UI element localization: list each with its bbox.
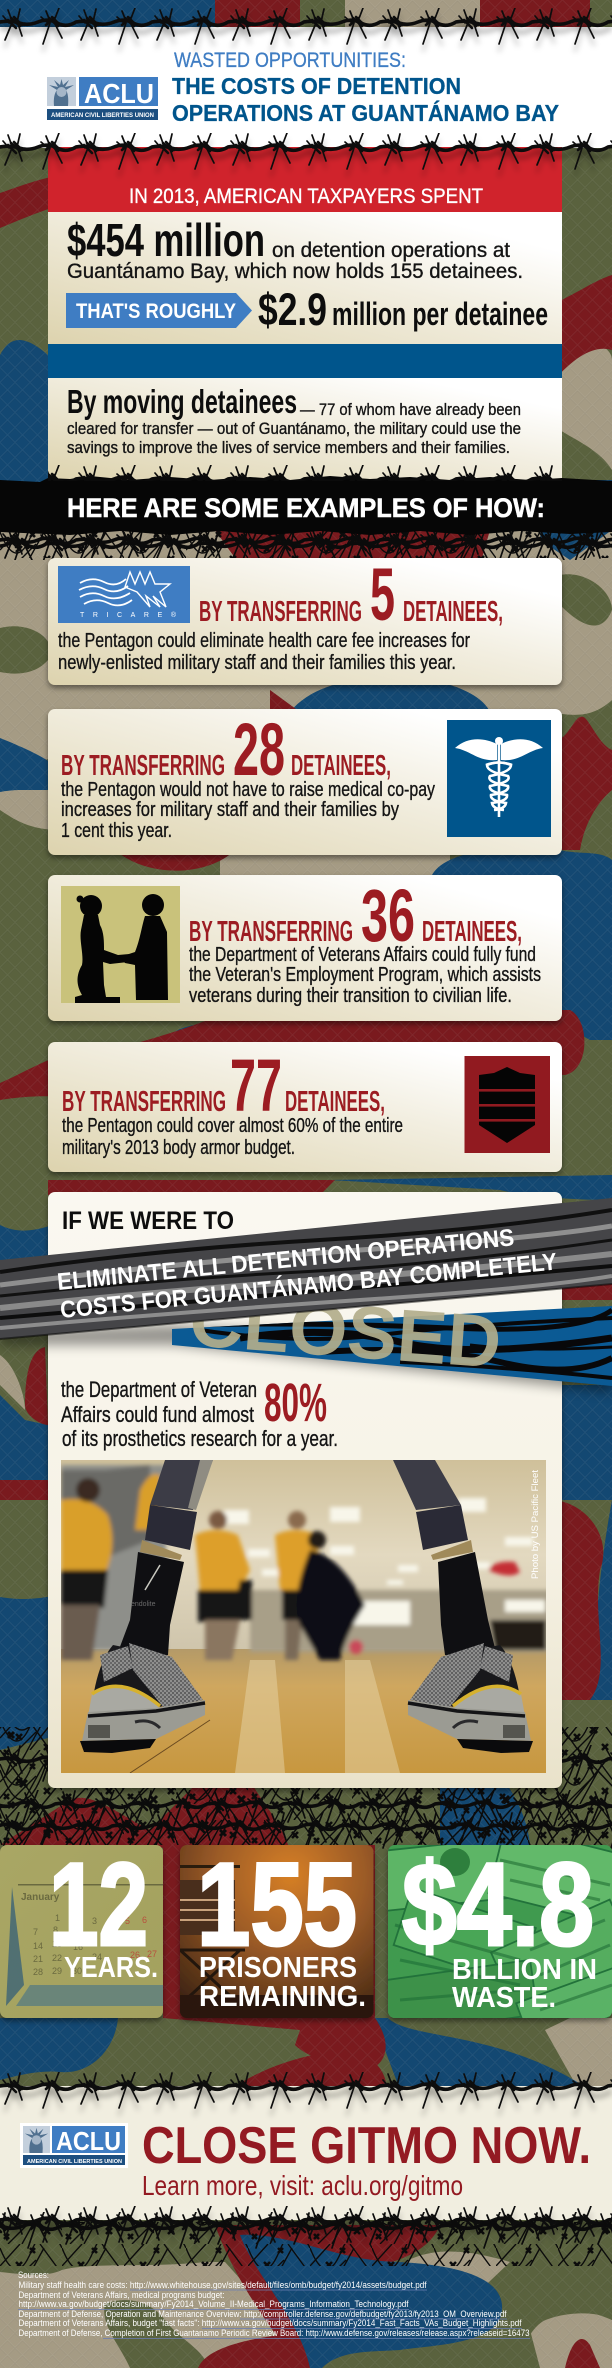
label billion in waste [452,1954,597,2014]
calendar image: 24 [92,1952,102,1962]
calendar image: 14 [33,1941,43,1951]
barbed wire strand above footer [0,2072,612,2114]
sources: Military staff health care costs: http://www.whitehouse.gov/sites/default/files/omb/budget/fy2014/assets/budget.pdf [18,2280,427,2290]
ACLU logo top: AMERICAN CIVIL LIBERTIES UNION [51,113,154,119]
description [58,630,470,674]
description: 1 cent this year. [61,820,172,842]
money image [388,1845,612,2018]
red heading strip: IN 2013, AMERICAN TAXPAYERS SPENT [129,185,483,208]
description [61,779,435,842]
wire tangle under black band [0,526,612,560]
description [62,1115,403,1159]
heading: BY TRANSFERRING [189,916,353,948]
description with 80 percent [61,1373,338,1451]
photo credit: Photo by US Pacific Fleet [530,1469,540,1579]
calendar image: 7 [33,1927,38,1937]
ACLU logo top: ACLU [84,78,154,109]
calendar image: 27 [147,1949,157,1959]
heading: BY TRANSFERRING [199,596,362,628]
tape text: COSTS FOR GUANTÁNAMO BAY COMPLETELY [59,1247,558,1324]
label prisoners remaining: PRISONERS [199,1952,357,1984]
closed stamp: CLOSED [187,1278,504,1384]
calendar image: 26 [130,1950,140,1960]
description: increases for military staff and their families by [61,799,399,821]
heading: DETAINEES, [285,1086,385,1118]
title: the costs of detention operations: THE COSTS OF DETENTION [172,73,461,99]
calendar image: 16 [73,1942,83,1952]
tile: 155 prisoners remaining [180,1839,374,2018]
icon: caduceus [447,720,551,837]
right prosthetic [393,1460,533,1753]
2.9 million per detainee: $2.9 [258,284,327,335]
icon: body armor shield [464,1056,550,1153]
label prisoners remaining: REMAINING. [199,1981,366,2013]
description: the Pentagon could cover almost 60% of the entire [62,1115,403,1137]
by moving detainees text [67,383,521,457]
guard tower image [180,1865,374,2018]
calendar image: 15 [52,1939,62,1949]
footer ACLU logo: ACLU [56,2126,121,2156]
454 million text: Guantánamo Bay, which now holds 155 detainees. [67,260,523,283]
title: the costs of detention operations [172,73,559,126]
description [189,944,541,1007]
label billion in waste: WASTE. [452,1982,556,2014]
by moving detainees text: — 77 of whom have already been [300,401,521,419]
2.9 million per detainee [258,284,548,335]
sources: Department of Veterans Affairs, medical programs budget: [18,2290,224,2300]
heading [189,874,522,957]
454 million text [67,214,523,283]
number 12: 12 [49,1839,148,1971]
sources [18,2270,530,2338]
calendar image: 29 [52,1966,62,1976]
title: the costs of detention operations: OPERATIONS AT GUANTÁNAMO BAY [172,99,559,126]
calendar image [6,1884,163,2006]
calendar image: 6 [142,1915,147,1925]
heading [61,708,391,791]
454 million text: on detention operations at [272,239,510,262]
description: newly-enlisted military staff and their families this year. [58,652,456,674]
by moving detainees text: cleared for transfer — out of Guantánamo, the military could use the [67,420,521,438]
ACLU logo top [47,77,158,120]
photo: prosthetic legs in gym [61,1460,550,1773]
heading [199,553,503,636]
barbed wire strand under header [0,133,612,175]
calendar image: 5 [125,1916,130,1926]
sources: Department of Defense, Operation and Maintenance Overview: http://comptroller.defense.gov/defbudget/fy2013/fy2013_OM_Overview.pdf [18,2309,507,2319]
label years: YEARS. [64,1952,158,1984]
label prisoners remaining [199,1952,366,2013]
sources: Department of Veterans Affairs, budget "fast facts": http://www.va.gov/budget/docs/summary/Fy2014_Fast_Facts_VAs_Budget_Highlights.pdf [18,2318,522,2328]
calendar image: 3 [92,1916,97,1926]
card: transferring 77 detainees [48,1042,562,1172]
sources: Department of Defense, Completion of First Guantanamo Periodic Review Board: http://www.defense.gov/releases/release.aspx?releaseid=16473 [18,2328,530,2338]
heading [62,1044,385,1127]
call to action: Learn more, visit: aclu.org/gitmo [142,2170,463,2201]
heading: BY TRANSFERRING [61,750,225,782]
call to action [142,2117,591,2201]
footer band [0,2086,612,2220]
tape text: ELIMINATE ALL DETENTION OPERATIONS [56,1224,515,1296]
white header band [0,27,612,148]
blue tape [172,1306,612,1386]
dense barbed wire behind the prosthetics panel [0,1727,612,1854]
heading: if we were to: IF WE WERE TO [62,1207,234,1235]
left prosthetic: endolite [131,1601,156,1608]
description with 80 percent: the Department of Veteran [61,1377,257,1402]
subtitle: wasted opportunities: WASTED OPPORTUNITIES: [174,49,406,72]
panel: if we were to eliminate detention costs [0,1192,612,1788]
footer ACLU logo [20,2123,128,2168]
barbed wire and coils under footer [0,2206,612,2266]
description with 80 percent: of its prosthetics research for a year. [62,1426,338,1451]
card: transferring 36 detainees [48,874,562,1021]
454 million text: $454 million [67,214,265,266]
calendar image: January [21,1892,60,1903]
description: veterans during their transition to civilian life. [189,985,512,1007]
heading: DETAINEES, [422,916,522,948]
icon: tricare logo [58,566,190,623]
heading: 5 [370,553,395,636]
left prosthetic [80,1460,213,1753]
description with 80 percent: Affairs could fund almost [61,1402,254,1427]
calendar image: 1 [55,1913,60,1923]
grey hazard tape [0,1198,612,1339]
card: transferring 5 detainees [48,553,562,685]
heading: 77 [230,1044,282,1127]
barbed wire strand top [0,8,612,50]
panel: taxpayers spent [48,147,562,480]
card: transferring 28 detainees [48,708,562,855]
by moving detainees text: savings to improve the lives of service members and their families. [67,439,510,457]
heading: DETAINEES, [291,750,391,782]
arrow: that's roughly [66,293,252,328]
black banner: here are some examples [0,465,612,535]
heading: BY TRANSFERRING [62,1086,226,1118]
description: the Pentagon could eliminate health care fee increases for [58,630,470,652]
tape shadow [0,1325,612,1392]
blue strip [48,344,562,378]
calendar image: 22 [52,1953,62,1963]
heading: DETAINEES, [403,596,503,628]
heading: 36 [361,874,415,957]
arrow: that's roughly: THAT'S ROUGHLY [76,300,236,323]
icon: handshake silhouettes [61,886,180,1003]
heading: 28 [233,708,285,791]
calendar image: 28 [33,1967,43,1977]
icon: tricare logo: TRICARE® [80,611,177,619]
number 155: 155 [197,1839,357,1971]
description with 80 percent: 80% [264,1373,327,1433]
black banner: here are some examples: HERE ARE SOME EXAMPLES OF HOW: [67,493,545,523]
footer ACLU logo: AMERICAN CIVIL LIBERTIES UNION [27,2159,122,2165]
calendar image: 21 [33,1954,43,1964]
description: the Pentagon would not have to raise medical co-pay [61,779,435,801]
description: military's 2013 body armor budget. [62,1137,295,1159]
sources: http://www.va.gov/budget/docs/summary/Fy2014_Volume_II-Medical_Programs_Information_Technology.pdf [18,2299,409,2309]
calendar image: 8 [53,1925,58,1935]
by moving detainees text: By moving detainees [67,383,297,420]
tile: 4.8 billion in waste [386,1845,612,2024]
calendar image: 30 [72,1966,82,1976]
red heading strip [48,147,562,212]
sources: Sources: [18,2270,49,2280]
label billion in waste: BILLION IN [452,1954,597,1986]
tile: 12 years [0,1839,163,2018]
